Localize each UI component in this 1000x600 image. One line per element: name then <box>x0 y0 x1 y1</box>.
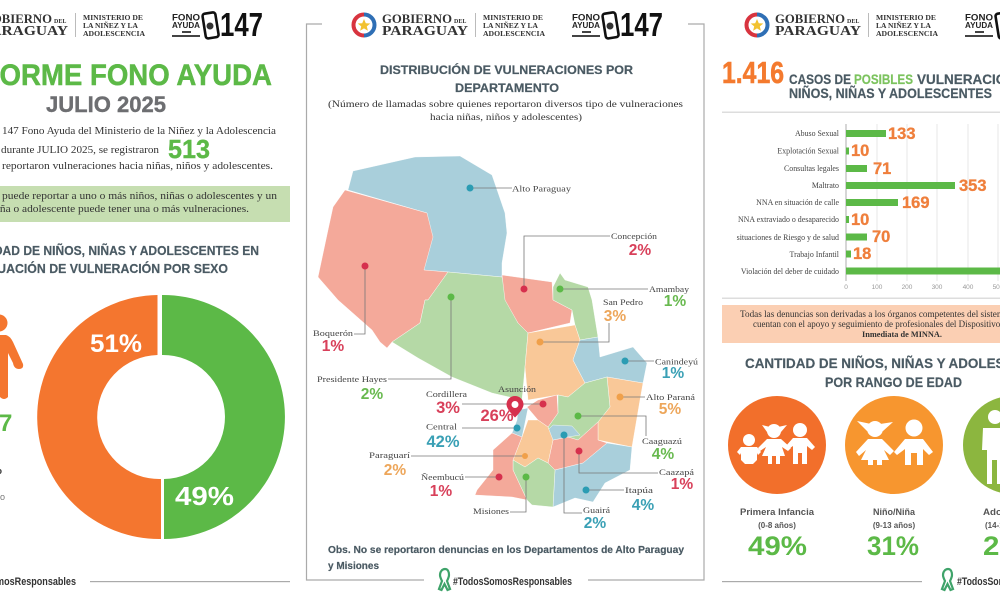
intro text block: durante JULIO 2025, se registraron <box>1 145 159 156</box>
label: Concepción: 2% <box>629 242 651 259</box>
label: Canindeyú: Canindeyú <box>655 358 698 366</box>
bar chart: NNA en situación de calle <box>756 198 839 207</box>
bar chart: 200 <box>902 284 913 291</box>
header logos centre: MINISTERIO DE <box>483 15 544 22</box>
header logos left <box>0 6 263 43</box>
bar chart: 71 <box>873 160 891 178</box>
panel: distribución por departamento <box>306 6 704 590</box>
label: Central <box>426 422 520 451</box>
bar chart: 100 <box>872 284 883 291</box>
header logos left: DEL <box>54 19 66 25</box>
label: Ñeembucú <box>421 472 502 500</box>
label: Itapúa: Itapúa <box>625 486 654 495</box>
donut chart: 51% <box>90 330 142 358</box>
label: Amambay: Amambay <box>649 285 689 294</box>
label: Concepción: Concepción <box>611 232 657 241</box>
label: Presidente Hayes: Presidente Hayes <box>317 375 387 384</box>
label: Misiones <box>473 474 530 516</box>
bar chart: 133 <box>888 125 916 143</box>
label: San Pedro: 3% <box>604 308 626 325</box>
label: Guairá: 2% <box>584 515 606 532</box>
bar chart: 10 <box>851 211 869 229</box>
header logos centre: PARAGUAY <box>382 24 468 39</box>
panel: informe fono ayuda <box>0 6 290 588</box>
bar chart: Consultas legales <box>784 164 839 173</box>
bar chart: 0 <box>844 284 848 291</box>
label: Alto Paraná <box>616 393 696 418</box>
header logos left: FONO <box>172 12 200 22</box>
bar chart: Maltrato <box>812 181 839 190</box>
label: Itapúa <box>582 486 654 514</box>
header logos right: GOBIERNO <box>775 12 845 26</box>
age group: primera infancia: 49% <box>748 531 807 561</box>
age group: primera infancia: (0-8 años) <box>758 521 796 530</box>
donut chart <box>37 295 285 539</box>
label: Amambay <box>556 285 689 310</box>
age group: niño niña: (9-13 años) <box>873 521 915 530</box>
age group: niño niña: 31% <box>867 531 919 561</box>
map subtitle: hacia niñas, niños y adolescentes) <box>430 112 582 122</box>
icon: baby and children <box>728 396 826 494</box>
panel: casos y edades <box>722 12 1000 590</box>
label: Amambay: 1% <box>664 293 686 310</box>
label: Itapúa: 4% <box>632 497 654 514</box>
header logos right: ADOLESCENCIA <box>876 31 938 38</box>
heading: casos: CASOS DE <box>789 72 851 87</box>
header logos centre: AYUDA <box>572 21 600 30</box>
bar chart: 353 <box>959 177 987 195</box>
icon: teenagers <box>963 396 1000 494</box>
header logos centre: 147 <box>620 6 663 43</box>
bar chart: 70 <box>872 228 890 246</box>
label: Canindeyú: 1% <box>662 365 684 382</box>
note box peach <box>722 305 1000 343</box>
label: Asunción with pin: Asunción <box>498 385 536 394</box>
heading: distribución: DEPARTAMENTO <box>455 81 559 95</box>
label: Presidente Hayes: 2% <box>361 386 383 403</box>
icon: green ribbon <box>439 569 450 590</box>
map subtitle: (Número de llamadas sobre quienes reportaron diversos tipo de vulneraciones <box>328 99 684 109</box>
label: Central: 42% <box>426 433 460 451</box>
label: Paraguarí: 2% <box>384 462 406 479</box>
label: Paraguarí <box>369 451 528 479</box>
label: Guairá <box>560 432 611 532</box>
age group: adolescente <box>963 396 1000 561</box>
header logos left: AYUDA <box>172 21 200 30</box>
label: Canindeyú <box>622 358 698 382</box>
label: Boquerón <box>313 262 368 355</box>
heading: por rango de edad <box>745 354 1000 390</box>
intro text block <box>1 126 277 172</box>
header logos right: DEL <box>847 19 859 25</box>
bar chart: Abuso Sexual <box>795 129 840 138</box>
heading: distribución: DISTRIBUCIÓN DE VULNERACIONES POR <box>380 62 633 77</box>
header logos left: 147 <box>220 6 263 43</box>
label: Caazapá: 1% <box>671 476 693 493</box>
header logos centre: FONO <box>572 12 600 22</box>
note box <box>0 186 290 222</box>
age group: primera infancia <box>728 396 826 561</box>
heading: distribución <box>380 62 633 95</box>
label: Guairá: Guairá <box>583 506 611 515</box>
label: Concepción <box>520 232 657 292</box>
header logos right: LA NIÑEZ Y LA <box>876 22 931 30</box>
bar chart: situaciones de Riesgo y de salud <box>737 233 839 242</box>
map subtitle <box>328 99 684 122</box>
heading: por rango de edad: POR RANGO DE EDAD <box>825 374 962 390</box>
label: Cordillera: Cordillera <box>426 390 468 399</box>
header logos left: LA NIÑEZ Y LA <box>83 22 138 30</box>
label: Asunción with pin: 26% <box>480 407 514 425</box>
header logos right: FONO <box>965 12 993 22</box>
label: Alto Paraná: Alto Paraná <box>646 393 696 402</box>
label: Caaguazú: Caaguazú <box>642 437 682 446</box>
header logos centre: LA NIÑEZ Y LA <box>483 22 538 30</box>
hashtag centre: #TodosSomosResponsables <box>453 576 572 588</box>
age group: niño niña: Niño/Niña <box>873 507 916 517</box>
header logos right: MINISTERIO DE <box>876 15 937 22</box>
heading: por sexo <box>0 243 259 276</box>
header logos centre <box>354 6 663 43</box>
bar chart: 18 <box>853 245 871 263</box>
bar chart: Violación del deber de cuidado <box>741 267 839 276</box>
bar chart: 10 <box>851 142 869 160</box>
observation note <box>328 544 684 572</box>
header logos left: MINISTERIO DE <box>83 15 144 22</box>
header logos centre: ADOLESCENCIA <box>483 31 545 38</box>
label: Presidente Hayes <box>317 294 454 403</box>
label: Caazapá <box>576 448 695 493</box>
icon: two children <box>845 396 943 494</box>
bar chart: Trabajo Infantil <box>790 250 840 259</box>
big number 513: 513 <box>168 134 210 164</box>
heading: casos <box>789 72 1000 101</box>
label: San Pedro: San Pedro <box>603 298 643 307</box>
note box: puede reportar a uno o más niños, niñas o adolescentes y un <box>2 191 277 202</box>
note box peach: Inmediata de MINNA. <box>862 329 942 339</box>
label: Boquerón: Boquerón <box>313 329 353 338</box>
header logos centre: GOBIERNO <box>382 12 452 26</box>
bar chart: 400 <box>963 284 974 291</box>
donut chart: 49% <box>175 481 234 511</box>
label: Paraguarí: Paraguarí <box>369 451 411 460</box>
label: Caazapá: Caazapá <box>659 468 695 477</box>
label: Alto Paraguay: Alto Paraguay <box>512 184 571 194</box>
header logos left: ADOLESCENCIA <box>83 31 145 38</box>
header logos right: PARAGUAY <box>775 24 861 39</box>
heading: casos: POSIBLES <box>854 72 913 87</box>
observation note: y Misiones <box>328 560 379 572</box>
header logos right: AYUDA <box>965 21 993 30</box>
label: San Pedro <box>536 298 643 346</box>
label: Ñeembucú: Ñeembucú <box>421 472 464 482</box>
intro text block: 147 Fono Ayuda del Ministerio de la Niñez y la Adolescencia <box>2 126 277 137</box>
label: Alto Paraguay <box>466 184 571 194</box>
label: Boquerón: 1% <box>322 338 344 355</box>
intro text block: reportaron vulneraciones hacia niñas, niños y adolescentes. <box>2 161 273 172</box>
subtitle: month: JULIO 2025 <box>46 92 166 117</box>
big number 1.416: 1.416 <box>722 55 784 90</box>
age group: niño niña <box>845 396 943 561</box>
label: Alto Paraná: 5% <box>659 401 681 418</box>
icon: green ribbon right <box>942 569 953 590</box>
label: Asunción with pin <box>480 385 536 425</box>
label: Cordillera <box>426 390 546 417</box>
bar chart: 300 <box>932 284 943 291</box>
label: Caaguazú <box>574 412 682 463</box>
label: Ñeembucú: 1% <box>430 483 452 500</box>
bar chart: 169 <box>902 194 930 212</box>
header logos right <box>746 12 1000 39</box>
bar chart: NNA extraviado o desaparecido <box>738 215 839 224</box>
map of Paraguay <box>318 156 647 507</box>
label: Cordillera: 3% <box>436 399 460 417</box>
label: Central: Central <box>426 422 458 432</box>
observation note: Obs. No se reportaron denuncias en los Departamentos de Alto Paraguay <box>328 544 684 556</box>
bar chart: Explotación Sexual <box>777 146 840 156</box>
bar chart <box>737 124 1000 291</box>
icon: person <box>0 314 23 399</box>
header logos centre: DEL <box>454 19 466 25</box>
label: Misiones: Misiones <box>473 507 509 516</box>
age group: primera infancia: Primera Infancia <box>740 507 815 517</box>
label: Caaguazú: 4% <box>652 446 674 463</box>
